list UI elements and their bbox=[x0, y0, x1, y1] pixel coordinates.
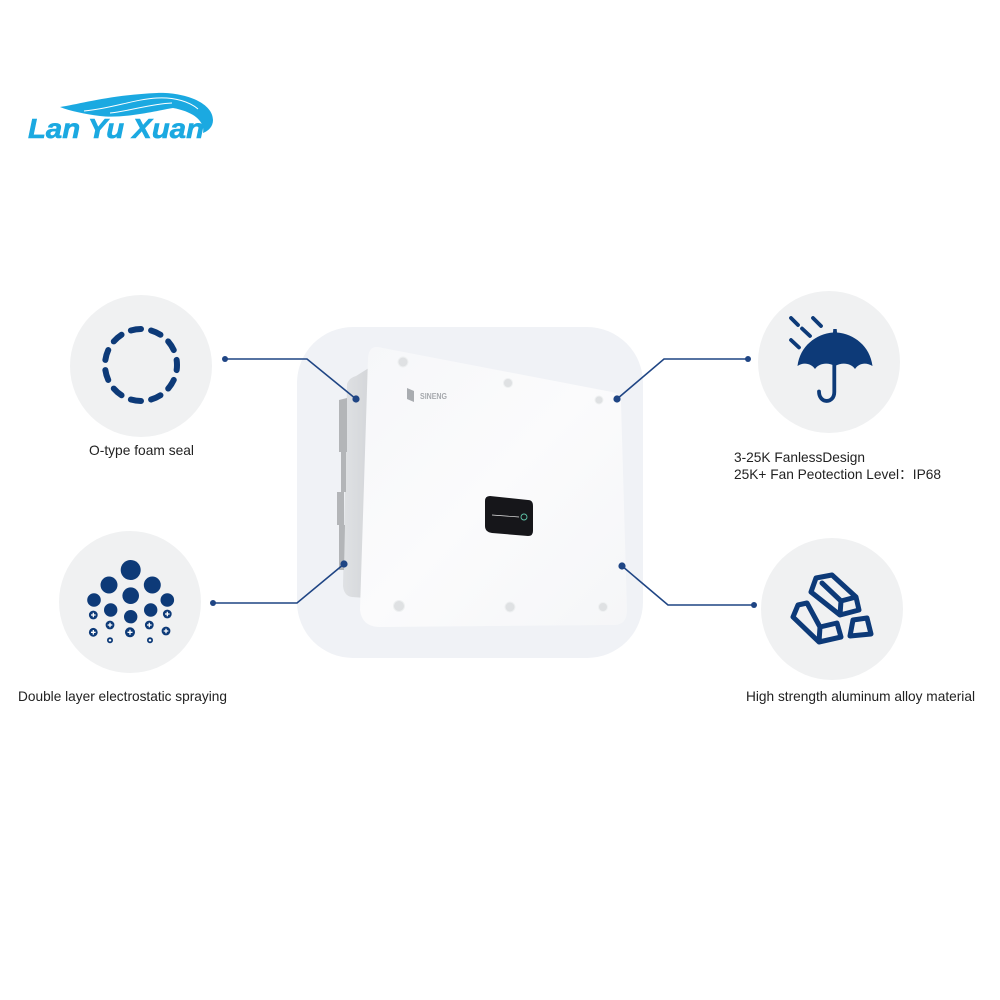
display ring bbox=[521, 514, 527, 520]
connector: top left bbox=[222, 356, 360, 403]
icon: umbrella bbox=[791, 318, 872, 401]
inverter display bbox=[485, 496, 533, 536]
inverter brand bbox=[407, 388, 447, 402]
connector: bottom left bbox=[210, 560, 348, 606]
icon: dashed seal ring bbox=[105, 329, 177, 401]
icon circle bbox=[70, 295, 212, 437]
top ingot bbox=[811, 575, 859, 615]
icon: powder particles bbox=[87, 560, 174, 643]
inverter rear body bbox=[343, 366, 372, 598]
panel: product backdrop bbox=[297, 327, 643, 658]
icon: plus marks bbox=[91, 612, 170, 642]
icon circle bbox=[761, 538, 903, 680]
inverter side brackets bbox=[337, 398, 347, 570]
logo: Lan Yu Xuan bbox=[28, 93, 213, 144]
display line bbox=[492, 515, 519, 517]
label bbox=[734, 450, 941, 482]
connector: top right bbox=[613, 356, 751, 403]
small ingot bbox=[850, 618, 871, 636]
icon: metal ingots bbox=[793, 575, 871, 642]
feature: O-type foam seal bbox=[70, 295, 212, 458]
feature: fanless design and protection bbox=[734, 291, 941, 482]
connector: bottom right bbox=[618, 562, 757, 608]
inverter product image bbox=[337, 347, 627, 627]
label: 3-25K FanlessDesign bbox=[734, 450, 865, 465]
display screen bbox=[485, 496, 533, 536]
umbrella canopy bbox=[798, 329, 872, 369]
label: 25K+ Fan Peotection Level：IP68 bbox=[734, 467, 941, 482]
label: High strength aluminum alloy material bbox=[746, 689, 975, 704]
left ingot bbox=[793, 603, 841, 642]
logo swoosh bbox=[60, 93, 213, 133]
brand mark bbox=[407, 388, 414, 402]
inverter front face bbox=[360, 347, 627, 627]
brand name: SINENG bbox=[420, 392, 447, 401]
feature: aluminum alloy material bbox=[746, 538, 975, 704]
icon circle bbox=[59, 531, 201, 673]
umbrella handle bbox=[819, 364, 834, 401]
logo wordmark: Lan Yu Xuan bbox=[28, 113, 204, 144]
inverter screws bbox=[394, 357, 608, 612]
feature: electrostatic spraying bbox=[18, 531, 227, 704]
icon circle bbox=[758, 291, 900, 433]
logo swoosh highlights bbox=[84, 98, 198, 113]
label: O-type foam seal bbox=[89, 443, 194, 458]
label: Double layer electrostatic spraying bbox=[18, 689, 227, 704]
rain drops bbox=[791, 318, 821, 348]
